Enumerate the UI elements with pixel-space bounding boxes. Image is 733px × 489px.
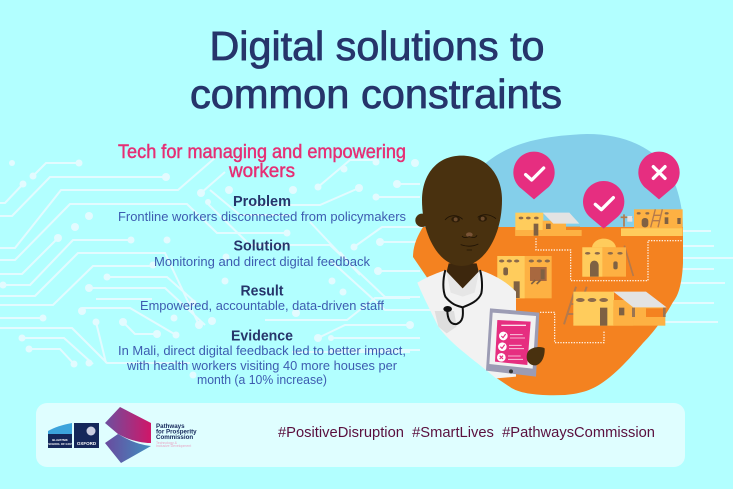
head bbox=[422, 156, 502, 266]
house: left bbox=[497, 256, 552, 298]
logo: Pathways for Prosperity Commission bbox=[105, 407, 197, 463]
stethoscope bbox=[443, 270, 482, 324]
eyes bbox=[445, 215, 496, 222]
text block: problem: Problem bbox=[233, 194, 291, 210]
dotted paths bbox=[536, 238, 683, 343]
pin: check centre bbox=[583, 181, 624, 229]
logo: Pathways for Prosperity Commission: Inclusive Development bbox=[156, 444, 191, 448]
neck bbox=[447, 263, 479, 288]
text block: result: Result bbox=[240, 284, 284, 300]
coat bbox=[417, 270, 516, 378]
text block: result: Empowered, accountable, data-driven staff bbox=[140, 298, 384, 313]
text block: evidence: Evidence bbox=[231, 328, 293, 344]
coat pocket bbox=[435, 311, 457, 333]
illustration detail bbox=[415, 152, 683, 378]
logo: Blavatnik School: BLAVATNIK bbox=[52, 438, 68, 442]
pin: cross right bbox=[638, 152, 680, 199]
tablet bbox=[486, 308, 539, 377]
circuit nodes bbox=[0, 158, 419, 378]
subheading: Tech for managing and empowering bbox=[118, 141, 406, 163]
sky bbox=[423, 134, 683, 227]
collar bbox=[446, 270, 479, 297]
subheading bbox=[118, 141, 406, 182]
text block: evidence: In Mali, direct digital feedback led to better impact, bbox=[118, 343, 406, 358]
pin: check left bbox=[513, 152, 555, 199]
logo: Blavatnik School bbox=[48, 423, 72, 448]
logo: Pathways for Prosperity Commission: Technology & bbox=[156, 441, 178, 445]
text block: problem bbox=[118, 194, 406, 224]
stethoscope head bbox=[443, 306, 452, 312]
logo: Pathways for Prosperity Commission: Commission bbox=[156, 434, 193, 441]
title: common constraints bbox=[190, 71, 562, 117]
ground bbox=[410, 227, 690, 402]
text block: solution: Solution bbox=[234, 238, 290, 254]
logo: University of Oxford: OXFORD bbox=[77, 441, 97, 446]
text block: evidence bbox=[118, 328, 406, 387]
house: bottom bbox=[564, 287, 667, 326]
logo: University of Oxford bbox=[74, 423, 99, 448]
text block: result bbox=[140, 284, 384, 313]
house: top centre bbox=[515, 213, 582, 236]
title bbox=[190, 23, 562, 117]
logo: Pathways for Prosperity Commission: Pathways bbox=[156, 423, 185, 430]
ear bbox=[415, 214, 429, 227]
text block: solution: Monitoring and direct digital feedback bbox=[154, 254, 370, 269]
circuit board pattern bbox=[0, 157, 733, 364]
hashtags: #PositiveDisruption #SmartLives #PathwaysCommission bbox=[278, 425, 655, 441]
house: centre with dome bbox=[582, 239, 633, 277]
text block: evidence: month (a 10% increase) bbox=[197, 372, 327, 387]
text block: solution bbox=[154, 238, 370, 269]
logo: Blavatnik School: SCHOOL OF GOV bbox=[48, 442, 72, 446]
doctor bbox=[415, 156, 516, 378]
text block: evidence: with health workers visiting 40 more houses per bbox=[126, 358, 398, 373]
hand bbox=[527, 347, 545, 365]
nose and mouth bbox=[461, 232, 478, 250]
logo: Pathways for Prosperity Commission: for Prosperity bbox=[156, 428, 197, 436]
footer panel bbox=[36, 403, 685, 467]
title: Digital solutions to bbox=[210, 23, 544, 69]
illustration: village scene in blob bbox=[410, 130, 690, 402]
text block: problem: Frontline workers disconnected from policymakers bbox=[118, 209, 406, 224]
subheading: workers bbox=[228, 160, 295, 182]
house: top right with ladder bbox=[621, 209, 683, 236]
